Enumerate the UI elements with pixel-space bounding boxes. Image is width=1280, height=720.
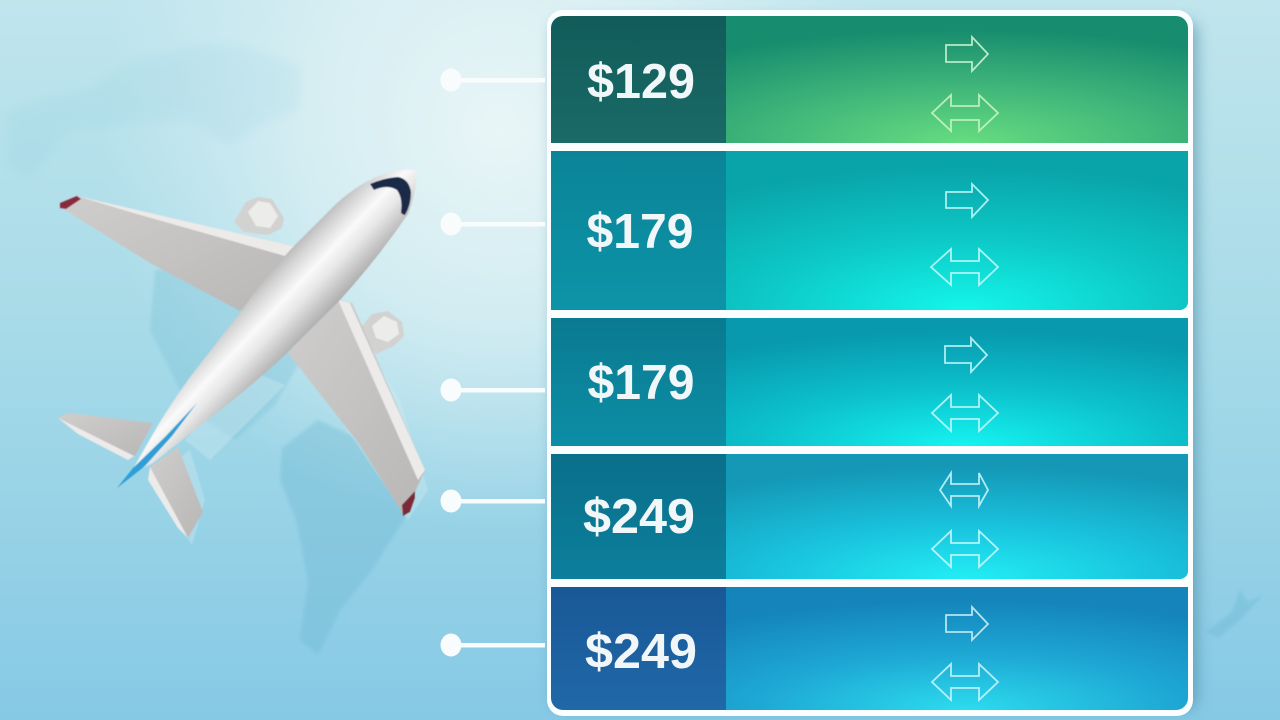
connector: row 3 — [440, 378, 545, 402]
landmass: northern arctic — [5, 44, 300, 180]
price: $179 — [588, 356, 694, 410]
connector: row 2 — [440, 212, 545, 236]
price: $249 — [583, 490, 695, 544]
landmass: south america — [280, 420, 412, 655]
panel: price table frame — [547, 10, 1193, 716]
cockpit window — [370, 177, 411, 215]
row 2: $179 — [551, 151, 1188, 310]
landmass: lower right island — [1206, 590, 1263, 638]
right wing — [288, 300, 425, 516]
airplane — [58, 170, 428, 545]
connector: row 4 — [440, 490, 545, 512]
icon: one-way arrow — [946, 37, 988, 71]
fuselage — [130, 170, 417, 474]
engine: upper — [234, 197, 284, 235]
landmass: north america — [150, 262, 300, 440]
connector: row 5 — [440, 634, 545, 656]
engine: lower — [362, 311, 404, 354]
price: $179 — [586, 205, 694, 259]
icon: one-way arrow — [946, 607, 988, 640]
icon: round-trip arrow — [932, 395, 998, 431]
panel shadow — [552, 20, 1198, 710]
row 5: $249 — [551, 587, 1188, 710]
price: $129 — [587, 55, 695, 109]
icon: one-way arrow — [946, 184, 988, 217]
tail stripe — [117, 403, 197, 488]
icon: round-trip arrow — [931, 249, 998, 285]
row 4: $249 — [551, 454, 1188, 579]
right tailplane — [148, 447, 203, 538]
plane shadow — [150, 310, 428, 545]
left tailplane — [58, 413, 153, 460]
icon: round-trip arrow — [932, 95, 998, 131]
connector: row 1 — [440, 68, 545, 92]
left wing — [60, 196, 297, 311]
row 3: $179 — [551, 318, 1188, 446]
row 1: $129 — [551, 16, 1188, 143]
icon: round-trip arrow small — [940, 473, 988, 506]
icon: round-trip arrow — [932, 664, 998, 700]
price: $249 — [585, 625, 697, 679]
icon: round-trip arrow — [932, 531, 998, 567]
icon: one-way arrow — [945, 338, 987, 372]
